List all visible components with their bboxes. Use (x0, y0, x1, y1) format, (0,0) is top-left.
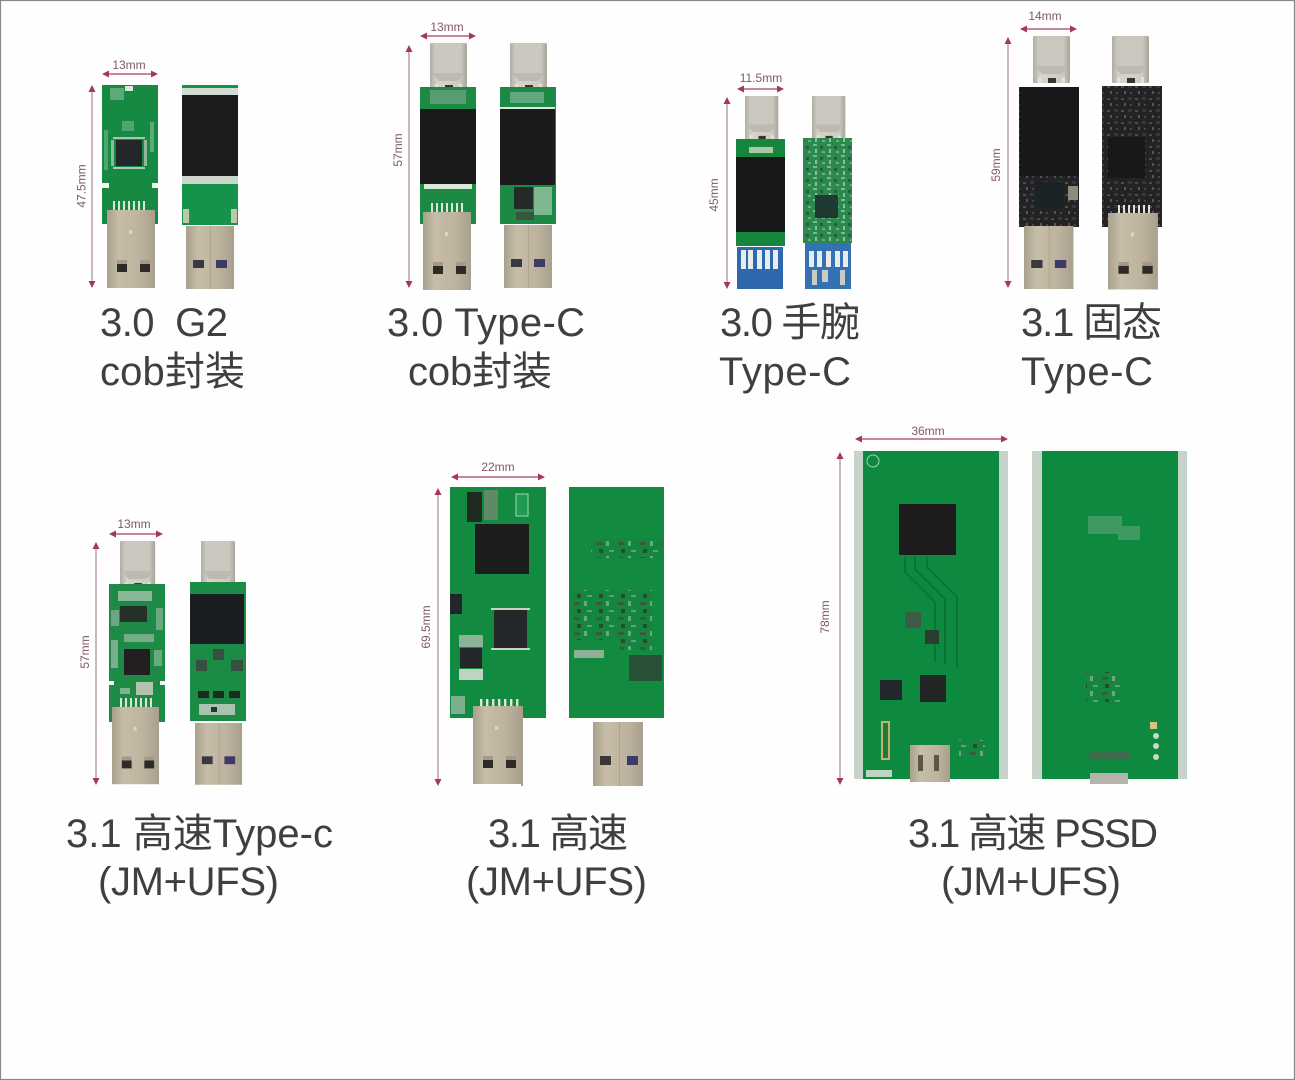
board front (109, 541, 165, 784)
board back (1102, 36, 1162, 289)
width dimension: 13mm (117, 517, 151, 531)
caption (908, 812, 1158, 904)
product: 3.1 high-speed Type-c (66, 517, 333, 904)
product: 3.1 solid-state Type-C (989, 9, 1162, 394)
caption: 3.0 G2 (100, 301, 228, 345)
caption (466, 812, 647, 904)
height dimension: 57mm (391, 133, 405, 167)
board back (190, 541, 246, 785)
board front (420, 43, 476, 290)
board front (102, 85, 158, 288)
product: 3.1 high-speed JM+UFS (419, 460, 664, 904)
width dimension (109, 517, 163, 538)
width dimension (737, 71, 784, 92)
caption (100, 301, 245, 394)
caption (387, 301, 585, 394)
caption: (JM+UFS) (941, 860, 1121, 904)
width dimension (102, 58, 158, 78)
caption: 3.0 手腕 (720, 301, 860, 345)
height dimension (989, 37, 1012, 288)
board back (1032, 451, 1187, 784)
product: 3.0 wristband Type-C (707, 71, 860, 394)
width dimension: 36mm (911, 424, 945, 438)
caption (1021, 301, 1162, 394)
caption: 3.0 Type-C (387, 301, 585, 345)
board back (569, 487, 664, 786)
board back (500, 43, 556, 288)
caption: (JM+UFS) (98, 860, 279, 904)
board front (450, 487, 546, 786)
height dimension: 57mm (78, 635, 92, 669)
width dimension (451, 460, 545, 480)
height dimension: 45mm (707, 178, 721, 212)
height dimension (419, 488, 442, 786)
width dimension: 22mm (481, 460, 515, 474)
height dimension (74, 85, 96, 288)
width dimension (855, 424, 1008, 442)
caption: cob封装 (408, 350, 552, 394)
board front (854, 451, 1008, 782)
height dimension (78, 542, 100, 785)
width dimension: 14mm (1028, 9, 1062, 23)
caption: Type-C (719, 350, 851, 394)
product: 3.1 high-speed PSSD (818, 424, 1187, 904)
caption (719, 301, 860, 394)
height dimension (818, 452, 844, 785)
width dimension (1020, 9, 1077, 32)
height dimension (391, 45, 412, 288)
caption (66, 812, 333, 904)
height dimension: 59mm (989, 148, 1003, 182)
height dimension: 78mm (818, 600, 832, 634)
caption: 3.1 固态 (1021, 301, 1162, 345)
height dimension: 69.5mm (419, 605, 433, 649)
width dimension: 13mm (112, 58, 146, 72)
caption: 3.1 高速 PSSD (908, 812, 1158, 856)
height dimension (707, 97, 730, 289)
caption: 3.1 高速Type-c (66, 812, 333, 856)
product: 3.0 Type-C cob (387, 20, 585, 394)
height dimension: 47.5mm (74, 164, 88, 208)
caption: Type-C (1021, 350, 1153, 394)
width dimension: 13mm (430, 20, 464, 34)
board back (803, 96, 852, 289)
caption: cob封装 (100, 350, 245, 394)
product: 3.0 G2 cob (74, 58, 245, 394)
width dimension: 11.5mm (740, 71, 782, 85)
caption: (JM+UFS) (466, 860, 647, 904)
width dimension (420, 20, 476, 40)
board back (182, 85, 238, 289)
board front (736, 96, 785, 289)
board front (1019, 36, 1079, 289)
caption: 3.1 高速 (488, 812, 628, 856)
